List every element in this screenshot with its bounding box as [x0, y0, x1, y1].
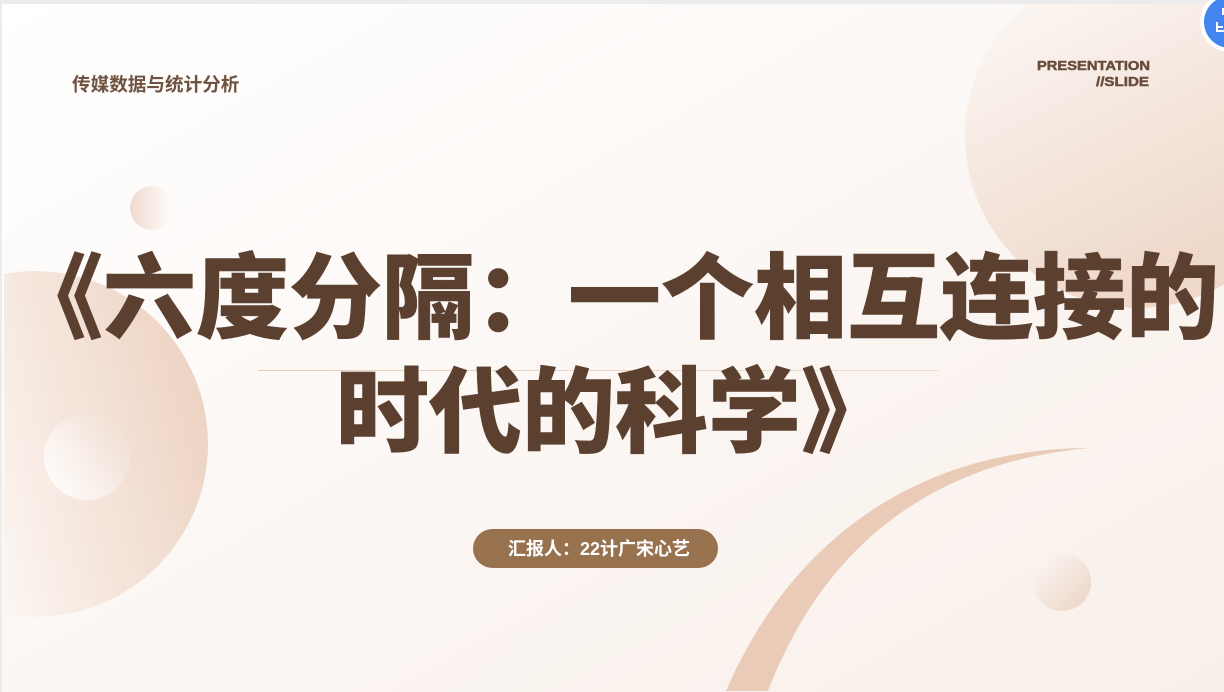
- left large circle: [4, 271, 208, 617]
- presentation slide label: //SLIDE: [1096, 74, 1149, 89]
- top right large circle: [965, 0, 1224, 308]
- divider line: [258, 370, 938, 371]
- presentation slide label: PRESENTATION: [1037, 58, 1150, 73]
- presenter pill: 汇报人：22计广宋心艺: [508, 538, 690, 559]
- main title: 《六度分隔：一个相互连接的: [10, 247, 1219, 351]
- subject label: 传媒数据与统计分析: [72, 74, 240, 95]
- top window bar: [0, 0, 1224, 4]
- small circle lower right: [1033, 553, 1091, 611]
- inner light circle: [44, 414, 130, 500]
- main title: [10, 247, 1219, 465]
- crescent arc: [726, 448, 1090, 691]
- presenter pill: [473, 529, 718, 568]
- presentation slide label: [1037, 58, 1150, 89]
- small circle upper left: [130, 186, 174, 230]
- main title: 时代的科学》: [336, 361, 894, 465]
- blue badge icon: [1200, 0, 1224, 52]
